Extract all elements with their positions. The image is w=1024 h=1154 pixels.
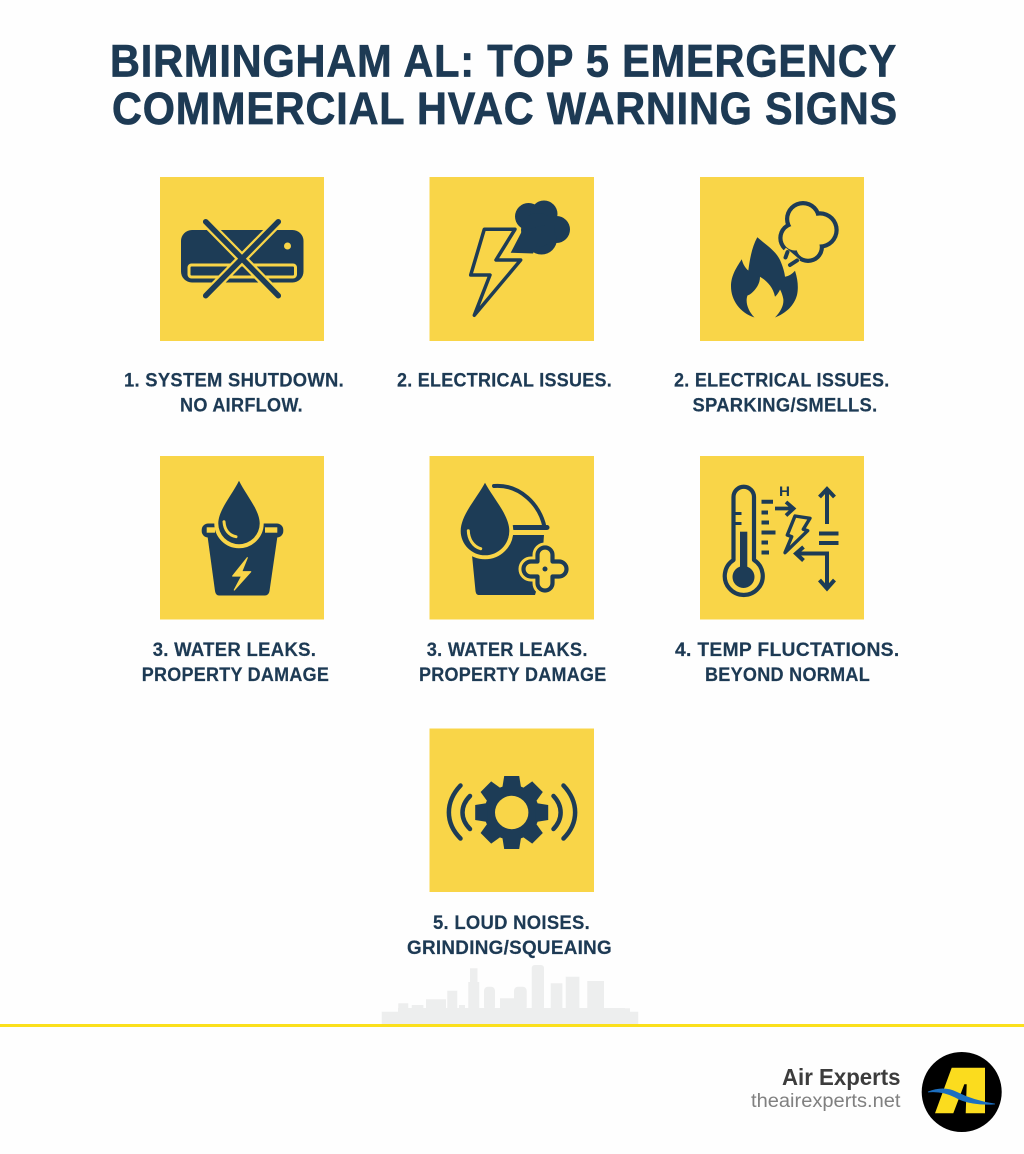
footer rule bbox=[0, 1024, 1024, 1027]
title bbox=[110, 36, 898, 134]
icon tile: loud noises bbox=[430, 728, 594, 892]
icon: flame and smoke bbox=[731, 201, 839, 318]
footer brand text: Air Experts bbox=[782, 1064, 900, 1090]
label: property damage bbox=[419, 639, 606, 686]
icon tile: temperature fluctuations bbox=[700, 456, 864, 620]
panel: water leaks with property damage bbox=[419, 456, 606, 686]
label: temperature fluctuations: 4. TEMP FLUCTATIONS. bbox=[675, 639, 900, 661]
icon: water drop, bucket and plus bbox=[461, 483, 567, 595]
label: water leaks bbox=[142, 639, 329, 686]
label: sparking and smells: SPARKING/SMELLS. bbox=[692, 395, 878, 417]
label: temperature fluctuations: BEYOND NORMAL bbox=[705, 664, 870, 686]
footer brand text bbox=[751, 1064, 901, 1112]
label: sparking and smells bbox=[674, 370, 890, 417]
title: BIRMINGHAM AL: TOP 5 EMERGENCY bbox=[110, 36, 897, 86]
label: property damage: 3. WATER LEAKS. bbox=[427, 639, 588, 661]
label: loud noises: GRINDING/SQUEAING bbox=[407, 937, 612, 959]
panel: sparking and smells bbox=[674, 177, 890, 417]
label: water leaks: 3. WATER LEAKS. bbox=[153, 639, 316, 661]
icon: water drop over bucket with bolt bbox=[202, 481, 283, 596]
icon tile: water leaks bbox=[160, 456, 324, 620]
icon: air conditioner crossed out bbox=[181, 222, 304, 296]
panel: system shutdown bbox=[124, 177, 344, 417]
icon: lightning bolt and smoke cloud bbox=[471, 200, 570, 315]
label: loud noises: 5. LOUD NOISES. bbox=[433, 912, 590, 934]
label: property damage: PROPERTY DAMAGE bbox=[419, 664, 606, 686]
panel: water leaks with electrical hazard bbox=[142, 456, 329, 686]
label: temperature fluctuations bbox=[675, 639, 900, 686]
skyline silhouette bbox=[382, 965, 638, 1024]
label: electrical issues: 2. ELECTRICAL ISSUES. bbox=[397, 370, 612, 392]
icon: thermometer with arrows bbox=[725, 483, 838, 595]
icon tile: sparking and smells bbox=[700, 177, 864, 341]
label: system shutdown bbox=[124, 370, 344, 417]
panel: electrical issues bbox=[397, 177, 612, 392]
panel: temperature fluctuations bbox=[675, 456, 900, 686]
icon tile: property damage bbox=[430, 456, 594, 620]
label: system shutdown: NO AIRFLOW. bbox=[180, 395, 303, 417]
label: sparking and smells: 2. ELECTRICAL ISSUES. bbox=[674, 370, 890, 392]
footer brand text: theairexperts.net bbox=[751, 1091, 901, 1112]
icon: gear with sound waves bbox=[449, 776, 575, 849]
icon: thermometer with arrows: H bbox=[779, 483, 790, 499]
panel: loud noises bbox=[407, 728, 612, 959]
icon tile: electrical issues bbox=[430, 177, 594, 341]
icon tile: system shutdown bbox=[160, 177, 324, 341]
label: water leaks: PROPERTY DAMAGE bbox=[142, 664, 329, 686]
label: loud noises bbox=[407, 912, 612, 959]
logo: Air Experts bbox=[922, 1052, 1002, 1132]
label: system shutdown: 1. SYSTEM SHUTDOWN. bbox=[124, 370, 344, 392]
title: COMMERCIAL HVAC WARNING SIGNS bbox=[112, 83, 898, 134]
